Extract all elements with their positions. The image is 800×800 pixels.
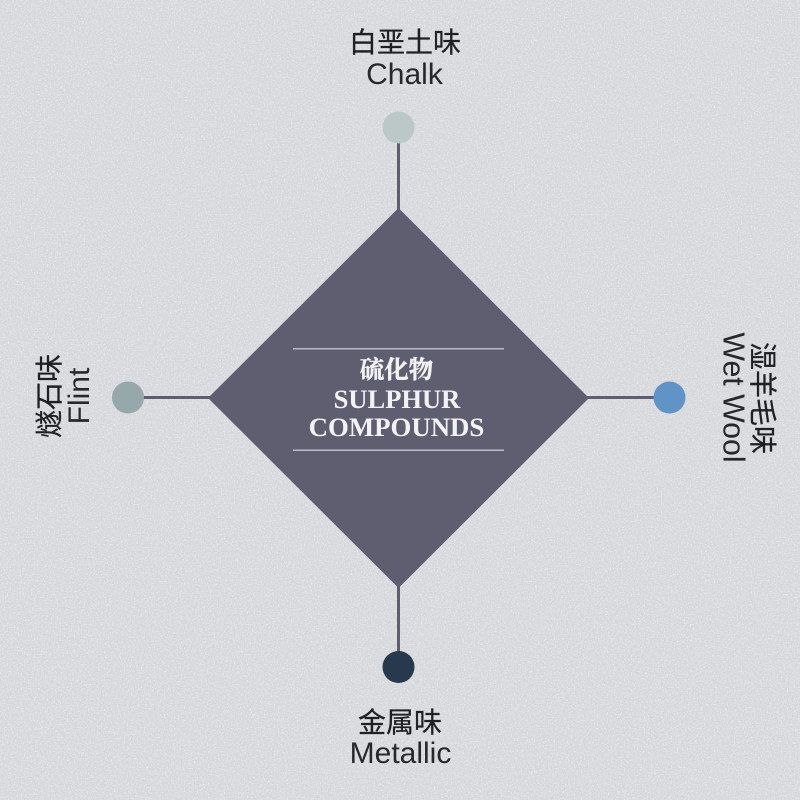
- branch: top connector line: [397, 140, 400, 212]
- branch: left connector line: [140, 396, 212, 399]
- label: chalk: Chalk: [366, 58, 444, 91]
- node: metallic dot: [382, 651, 414, 683]
- chinese heading: 硫化物: [360, 356, 434, 384]
- label: metallic: [350, 707, 451, 770]
- heading: sulphur: SULPHUR: [334, 384, 461, 414]
- label: metallic: 金属味: [358, 707, 442, 738]
- branch: right connector line: [584, 396, 658, 399]
- node: wet wool dot: [654, 382, 686, 414]
- label: flint: [34, 354, 96, 438]
- label: flint: 燧石味: [34, 354, 65, 438]
- label: wet wool: [716, 332, 778, 463]
- label: chalk: [349, 27, 461, 91]
- label: wet wool: Wet Wool: [716, 332, 750, 463]
- central diamond panel: [208, 208, 589, 588]
- label: metallic: Metallic: [350, 737, 451, 770]
- upper rule: [293, 348, 504, 350]
- branch: bottom connector line: [397, 584, 400, 655]
- label: chalk: 白垩土味: [349, 27, 461, 58]
- lower rule: [293, 450, 504, 451]
- node: flint dot: [112, 382, 144, 414]
- label: wet wool: 湿羊毛味: [747, 342, 778, 454]
- node: chalk dot: [382, 112, 414, 144]
- label: flint: Flint: [63, 367, 96, 424]
- heading: compounds: COMPOUNDS: [309, 412, 484, 442]
